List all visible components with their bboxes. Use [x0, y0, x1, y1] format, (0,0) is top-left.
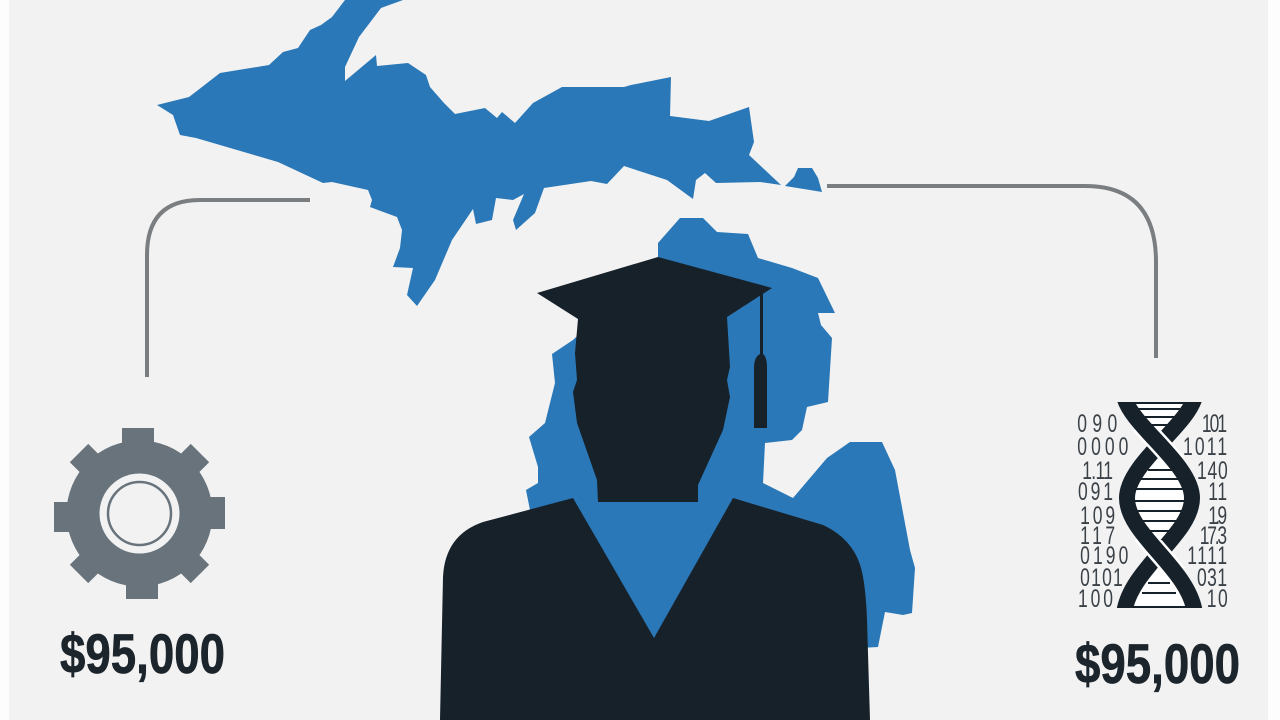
binary digits: right column: 10 [1207, 584, 1228, 613]
binary digits: right column: 1.9 [1208, 501, 1227, 530]
binary digits: left column: 117 [1080, 521, 1115, 550]
binary digits: left column: 100 [1078, 584, 1113, 613]
tassel [754, 288, 767, 428]
head and mortarboard [537, 257, 772, 502]
binary digits: right column: 101 [1202, 409, 1227, 438]
icon: DNA helix with binary digits [1077, 396, 1228, 614]
binary digits: right column: 031 [1197, 563, 1227, 592]
binary digits: right column: 140 [1197, 456, 1228, 485]
binary digits: right column [1183, 409, 1228, 613]
icon: gear [54, 428, 225, 599]
binary digits: left column: 091 [1078, 477, 1113, 506]
gown [440, 498, 870, 720]
salary: left: $95,000 [60, 622, 225, 685]
binary digits: left column: 109 [1080, 501, 1115, 530]
graduate silhouette [440, 257, 870, 720]
helix white backing [1128, 403, 1192, 606]
binary digits: right column: 17.3 [1200, 521, 1227, 550]
binary digits: left column: 1.11 [1082, 456, 1113, 485]
binary digits: left column: 0101 [1080, 563, 1123, 592]
connector line: left [147, 200, 310, 377]
binary digits: left column [1077, 409, 1128, 613]
map: Michigan [157, 0, 915, 700]
island at eastern tip [785, 168, 822, 192]
binary digits: right column: 11 [1208, 477, 1227, 506]
upper peninsula [157, 0, 781, 306]
salary: right: $95,000 [1075, 632, 1240, 695]
binary digits: right column: 1011 [1183, 432, 1227, 461]
connector line: right [827, 186, 1156, 358]
helix rungs [1119, 403, 1199, 607]
lower peninsula [526, 218, 915, 700]
binary digits: left column: 0190 [1080, 541, 1128, 570]
binary digits: right column: 1111 [1187, 541, 1227, 570]
binary digits: left column: 0000 [1077, 432, 1128, 461]
binary digits: left column: 090 [1077, 409, 1117, 438]
helix strands [1124, 396, 1195, 614]
